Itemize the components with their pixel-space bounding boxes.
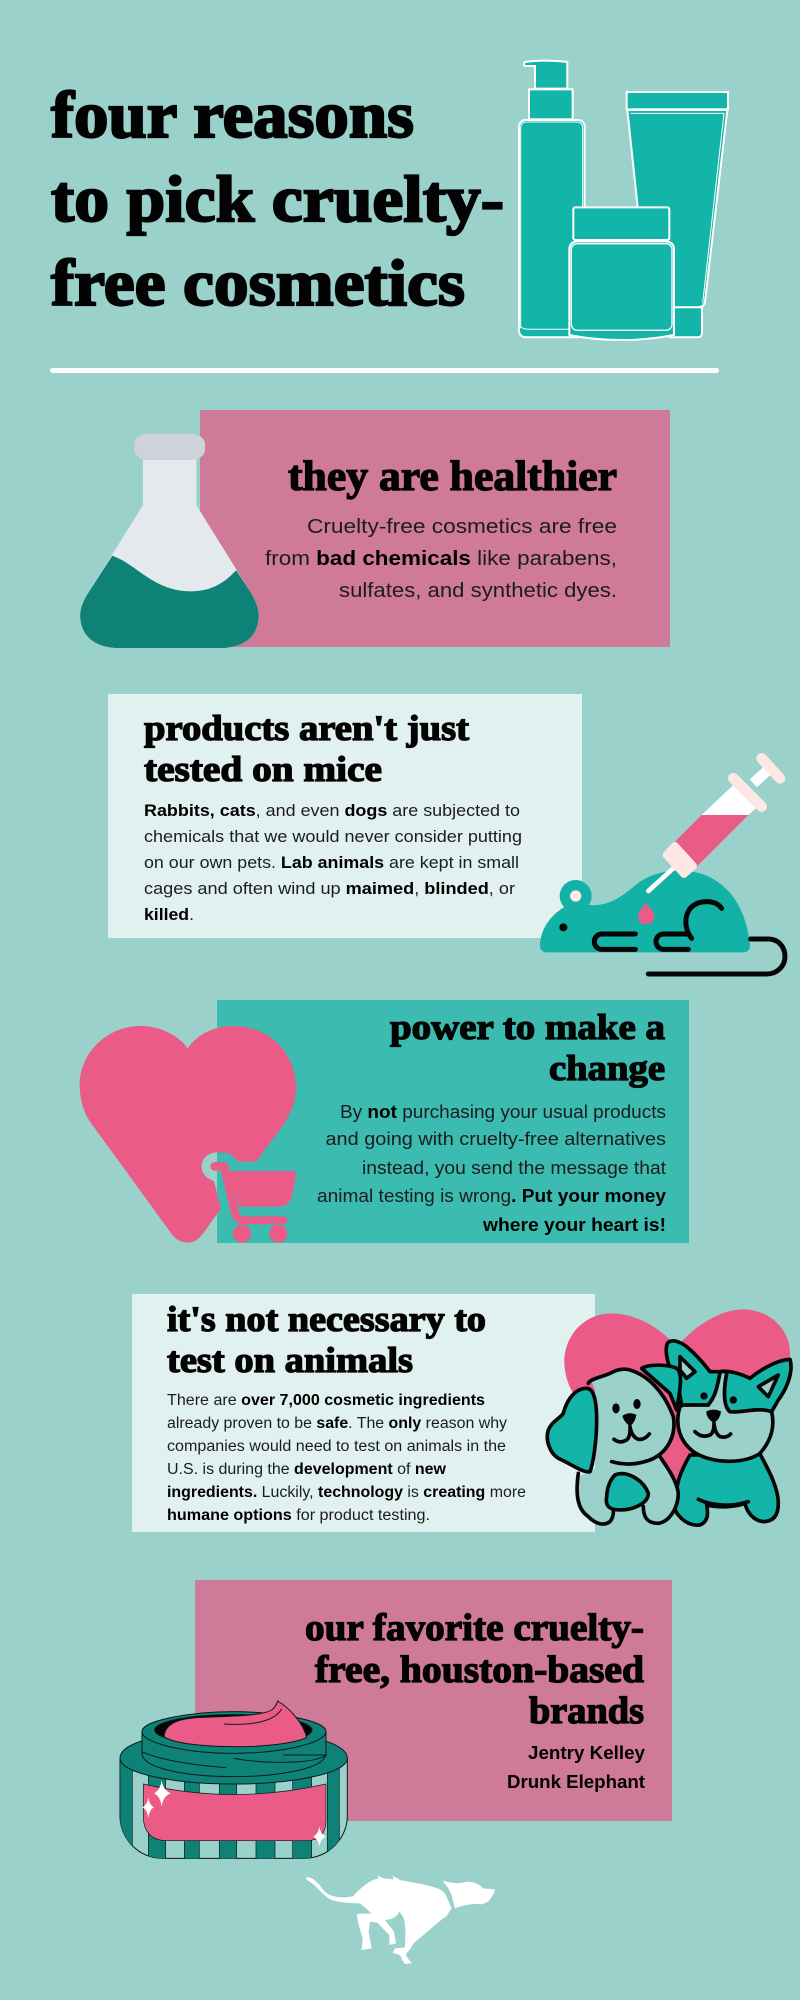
heading: tested on mice <box>144 749 382 789</box>
heading: power to make a <box>390 1007 665 1047</box>
text block: Cruelty-free cosmetics are free <box>307 515 617 538</box>
brand list: Drunk Elephant <box>507 1772 645 1792</box>
text block: killed. <box>144 905 194 924</box>
text block: animal testing is wrong . Put your money <box>317 1186 666 1206</box>
panel: products aren't just tested on mice <box>108 694 582 938</box>
heading: products aren't just <box>144 708 469 748</box>
text block: cages and often wind up maimed , blinded, or <box>144 879 515 898</box>
title <box>51 79 504 320</box>
panel: our favorite brands <box>195 1580 672 1821</box>
icon: mouse and syringe <box>540 758 785 974</box>
text block: from bad chemicals like parabens, <box>265 547 617 570</box>
panel: power to make a change <box>217 1000 689 1243</box>
heading: they are healthier <box>288 454 617 500</box>
title: to pick cruelty- <box>51 163 504 236</box>
title: four reasons <box>51 79 414 152</box>
panel: they are healthier <box>200 410 670 647</box>
text block: and going with cruelty-free alternatives <box>326 1129 666 1149</box>
title: free cosmetics <box>51 247 465 320</box>
heading: change <box>549 1048 665 1088</box>
divider line <box>50 368 719 373</box>
text block <box>317 1102 666 1235</box>
icon: puppy and corgi with heart <box>547 1309 791 1525</box>
text block: humane options for product testing. <box>167 1507 430 1524</box>
text block: on our own pets. Lab animals are kept in small <box>144 853 519 872</box>
text block: sulfates, and synthetic dyes. <box>339 579 617 602</box>
icon: flask <box>80 434 259 648</box>
text block: where your heart is! <box>482 1215 666 1235</box>
heading <box>167 1299 486 1380</box>
text block <box>265 515 617 602</box>
brand list: Jentry Kelley <box>528 1743 645 1763</box>
brand list <box>507 1743 645 1792</box>
icon: cosmetic bottles <box>519 61 728 340</box>
text block: Rabbits, cats , and even dogs are subjected to <box>144 801 520 820</box>
heading: it's not necessary to <box>167 1299 486 1339</box>
text block <box>167 1392 526 1524</box>
icon: cream jar <box>120 1701 347 1860</box>
heading <box>305 1607 644 1732</box>
text block: By not purchasing your usual products <box>340 1102 666 1122</box>
icon: running dog logo <box>306 1876 495 1964</box>
icon: heart and shopping cart <box>80 1026 296 1243</box>
text block: chemicals that we would never consider putting <box>144 827 522 846</box>
text block: companies would need to test on animals in the <box>167 1438 506 1455</box>
heading: our favorite cruelty- <box>305 1607 644 1649</box>
text block: instead, you send the message that <box>362 1158 666 1178</box>
text block: ingredients. Luckily, technology is creating more <box>167 1484 526 1501</box>
panel: it's not necessary to test on animals <box>132 1294 595 1532</box>
text block: There are over 7,000 cosmetic ingredients <box>167 1392 485 1409</box>
text block: already proven to be safe. The only reason why <box>167 1415 507 1432</box>
heading <box>144 708 469 789</box>
heading <box>390 1007 665 1088</box>
heading: free, houston-based <box>315 1649 644 1691</box>
heading: test on animals <box>167 1340 413 1380</box>
text block <box>144 801 522 924</box>
heading: brands <box>529 1690 644 1732</box>
text block: U.S. is during the development of new <box>167 1461 447 1478</box>
